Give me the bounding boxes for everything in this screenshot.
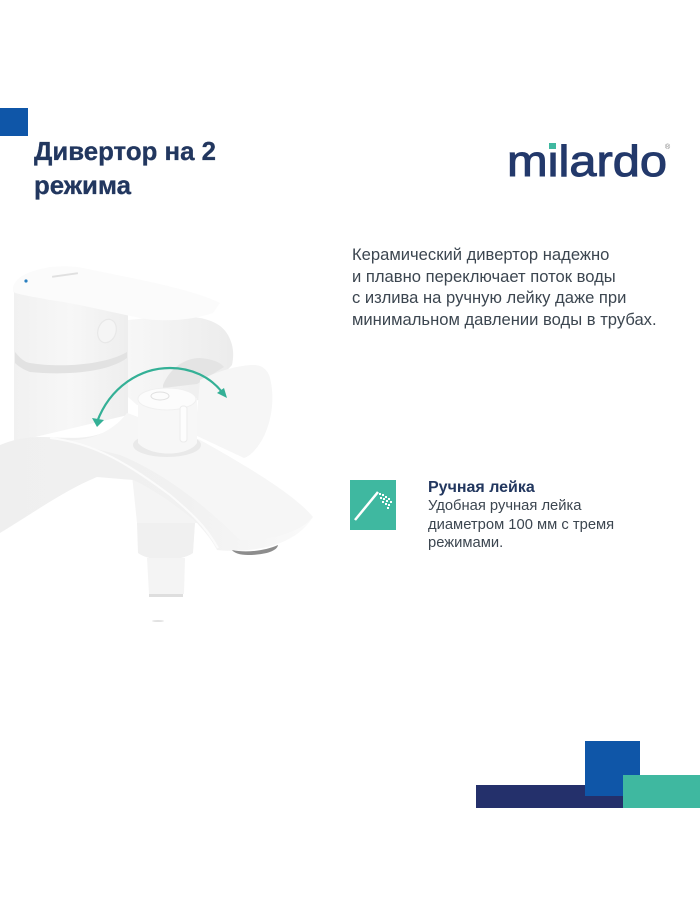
feature description: Удобная ручная лейка [428, 498, 581, 514]
title [34, 138, 216, 200]
faucet body [14, 290, 128, 442]
description text: Керамический дивертор надежно [352, 245, 609, 264]
decorative blue square, top left [0, 108, 28, 136]
feature heading: hand shower: Ручная лейка [428, 479, 535, 496]
feature description [428, 498, 614, 551]
description text: минимальном давлении воды в трубах. [352, 310, 657, 329]
description text: с излива на ручную лейку даже при [352, 288, 626, 307]
aerator [232, 545, 278, 555]
description text: и плавно переключает поток воды [352, 267, 616, 286]
logo: milardo: milardo [507, 137, 667, 185]
description text [352, 245, 657, 329]
diverter knob [133, 388, 201, 457]
spout [0, 413, 313, 551]
teal rotation arrow [92, 368, 227, 427]
faucet back bracket [128, 316, 233, 405]
lever handle [13, 266, 220, 320]
diverter plate [195, 365, 272, 458]
icon: hand shower [350, 480, 396, 530]
title: режима [34, 172, 131, 200]
decorative blocks, bottom right [476, 741, 700, 808]
feature description: режимами. [428, 535, 503, 551]
faucet illustration with diverter arrow [0, 272, 312, 622]
logo: milardo: ® [665, 143, 671, 151]
lower pipe [132, 475, 197, 523]
feature description: диаметром 100 мм с тремя [428, 516, 614, 532]
title: Дивертор на 2 [34, 138, 216, 166]
